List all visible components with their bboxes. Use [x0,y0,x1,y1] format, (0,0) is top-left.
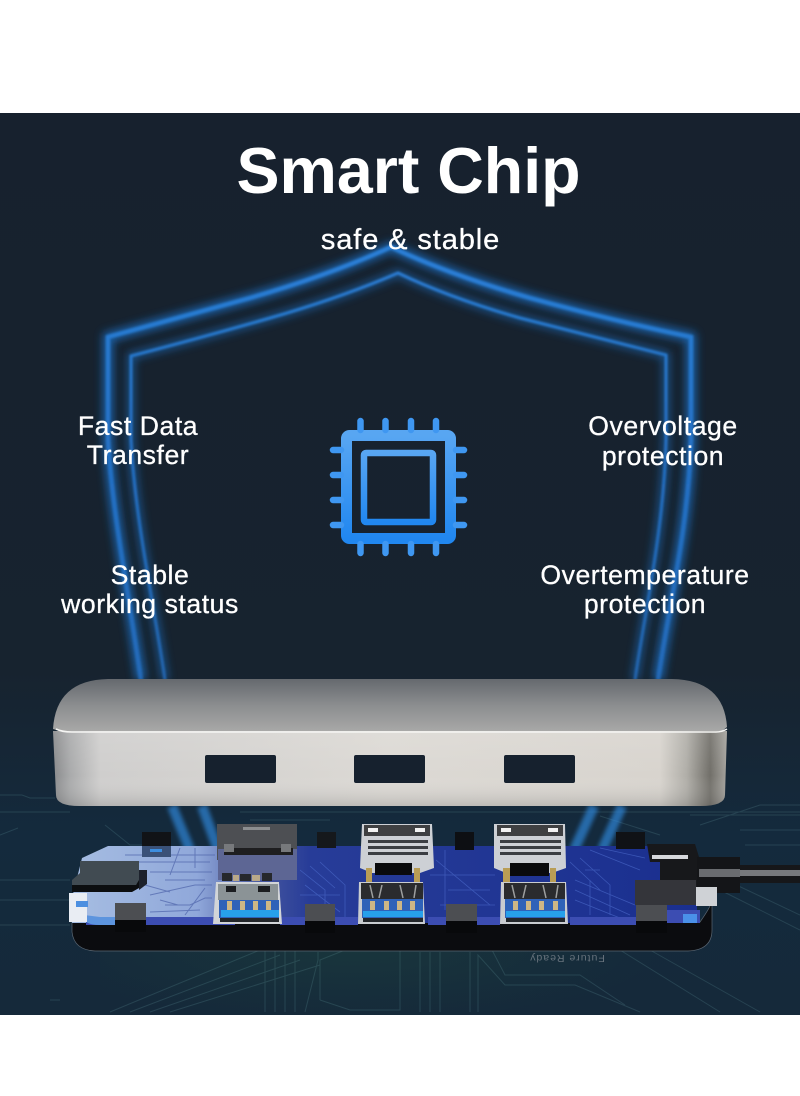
highlight edge [56,729,727,732]
top face [53,679,727,731]
white connector left [69,893,87,922]
circuit board assembly [69,824,800,951]
printed text on tray reflection: Future Ready [529,952,605,964]
port opening 3 [504,755,575,783]
port opening 2 [354,755,425,783]
port opening 1 [205,755,276,783]
outer shield line [108,247,691,680]
front face [53,731,727,806]
shield outline glow [108,247,691,680]
usb port 1 [213,882,282,924]
hub enclosure [53,679,727,806]
energy beams under device [172,806,622,850]
hdmi port 2 [494,824,566,882]
icon: chip [333,421,464,553]
label: fast data transfer: Transfer [87,440,189,470]
pcb [72,846,697,923]
inner shield line [131,273,666,680]
black tray [72,900,712,951]
title: Smart Chip [236,135,581,207]
usb port 2 [358,882,425,924]
subtitle: safe & stable [321,224,500,256]
usb port 3 [500,882,568,924]
label: overvoltage protection: Overvoltage [588,411,738,441]
standoff clips rear [142,832,645,857]
label: overvoltage protection: protection [602,441,724,471]
standoff clips front [115,903,667,933]
label: fast data transfer: Fast Data [78,411,198,441]
label: stable working status: Stable [111,560,189,590]
hdmi port 1 [360,824,434,882]
usb-c connector and cable [635,844,800,906]
sd card slot [72,861,139,889]
pcb traces blue side [300,848,645,920]
pcb traces pale side [122,848,215,915]
pcb edge highlight [86,910,700,925]
label: overtemperature protection: Overtemperature [540,560,750,590]
rj45 port [217,824,297,881]
label: overtemperature protection: protection [584,589,706,619]
circuit trace background [0,795,800,1012]
label: stable working status: working status [60,589,239,619]
